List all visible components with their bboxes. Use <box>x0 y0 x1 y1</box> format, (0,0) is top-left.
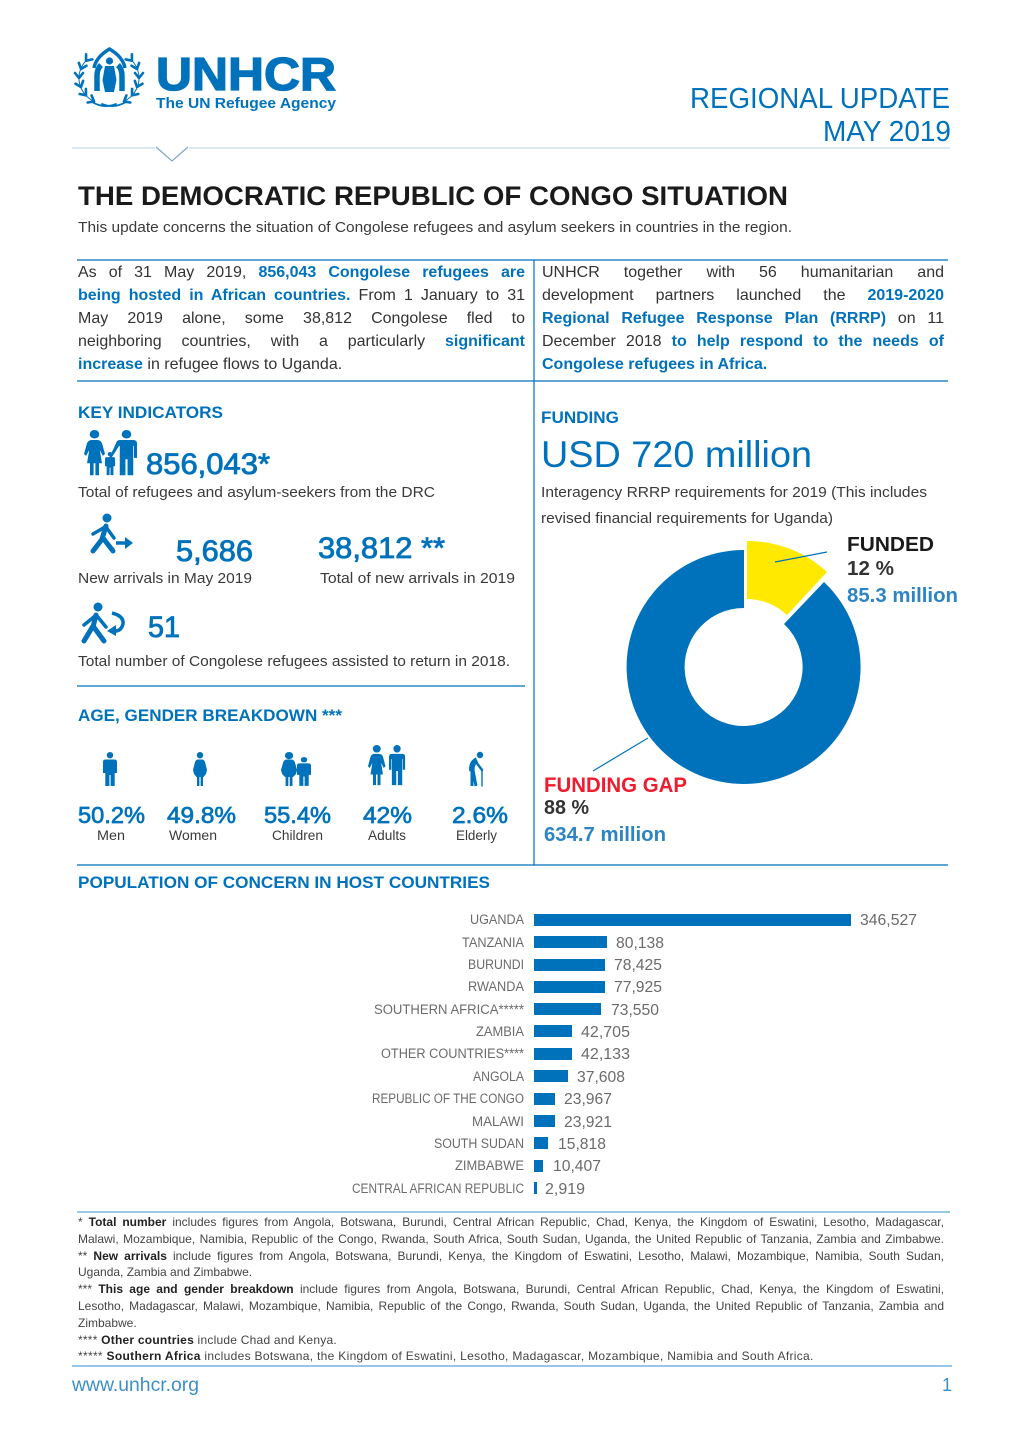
footnotes: Zimbabwe. <box>78 1316 137 1330</box>
stat: women: 49.8% <box>167 802 236 828</box>
icon: man <box>103 752 117 786</box>
footnotes: *** This age and gender breakdown include figures from Angola, Botswana, Burundi, Central African Republic, Chad, Kenya, the Kingdom of Eswatini, <box>78 1282 944 1296</box>
footnotes: ** New arrivals include figures from Angola, Botswana, Burundi, Kenya, the Kingdom of Eswatini, Lesotho, Malawi, Mozambique, Namibia, South Sudan, <box>78 1249 944 1263</box>
callout: funded: 12 % <box>847 558 894 580</box>
footnotes: Lesotho, Madagascar, Malawi, Mozambique, Namibia, Republic of the Congo, Rwanda, South Sudan, Uganda, the United Republic of Tanzania, Zambia and <box>78 1299 944 1313</box>
text block: response plan: development partners launched the 2019-2020 <box>542 287 944 304</box>
bar chart: REPUBLIC OF THE CONGO <box>372 1091 524 1106</box>
stat: children <box>264 802 331 843</box>
text block: situation summary: As of 31 May 2019, 856,043 Congolese refugees are <box>78 264 525 281</box>
stat: elderly: Elderly <box>456 828 497 843</box>
page number: 1 <box>942 1375 952 1395</box>
label: assisted returns: Total number of Congolese refugees assisted to return in 2018. <box>78 653 510 670</box>
callout: funding gap <box>544 774 687 846</box>
figure: new arrivals 2019: 38,812 ** <box>318 532 445 565</box>
icon: walking person with arrow <box>93 514 133 551</box>
footnotes <box>78 1214 944 1366</box>
label: total refugees: Total of refugees and asylum-seekers from the DRC <box>78 484 435 501</box>
bar chart: ANGOLA <box>473 1069 524 1084</box>
footnotes: **** Other countries include Chad and Kenya. <box>78 1333 337 1347</box>
donut chart <box>593 541 861 784</box>
text block: response plan: December 2018 to help respond to the needs of <box>542 333 944 350</box>
stat: women <box>167 802 236 843</box>
footer url: www.unhcr.org <box>71 1375 199 1396</box>
bar chart: CENTRAL AFRICAN REPUBLIC <box>352 1181 524 1196</box>
heading: key indicators: KEY INDICATORS <box>78 403 223 422</box>
bar chart: 23,921 <box>564 1114 612 1131</box>
icon: woman <box>193 752 207 786</box>
bar chart <box>352 912 917 1198</box>
text block: requirements note: Interagency RRRP requirements for 2019 (This includes <box>541 484 927 501</box>
footnotes: Uganda, Zambia and Zimbabwe. <box>78 1265 252 1279</box>
figure: new arrivals May: 5,686 <box>176 535 253 568</box>
panel: key indicators <box>78 403 515 670</box>
bar chart: 42,133 <box>581 1046 630 1063</box>
bar chart: TANZANIA <box>462 935 524 950</box>
text block: situation summary: being hosted in African countries. From 1 January to 31 <box>78 287 525 304</box>
figure: total requirements: USD 720 million <box>541 434 812 475</box>
label: new arrivals May: New arrivals in May 2019 <box>78 570 252 587</box>
stat: men <box>78 802 145 843</box>
bar chart: UGANDA <box>470 912 524 927</box>
icon: adults <box>368 745 405 785</box>
text block: situation summary <box>78 261 525 379</box>
bar chart: 73,550 <box>611 1002 659 1019</box>
stat: adults <box>363 802 412 843</box>
figure: assisted returns: 51 <box>148 611 180 644</box>
bar chart: 78,425 <box>614 957 662 974</box>
bar chart: MALAWI <box>472 1114 524 1129</box>
heading: population of concern: POPULATION OF CONCERN IN HOST COUNTRIES <box>78 873 490 892</box>
subtitle: This update concerns the situation of Congolese refugees and asylum seekers in countries in the region. <box>78 219 792 236</box>
bar chart: 42,705 <box>581 1024 630 1041</box>
footnotes: * Total number includes figures from Angola, Botswana, Burundi, Central African Republic, Chad, Kenya, the Kingdom of Eswatini, Lesotho, Madagascar, <box>78 1215 944 1229</box>
footnotes: ***** Southern Africa includes Botswana, the Kingdom of Eswatini, Lesotho, Madagascar, Mozambique, Namibia and South Africa. <box>78 1349 814 1363</box>
callout: funded: 85.3 million <box>847 585 958 607</box>
icon: family <box>84 430 137 475</box>
stat: men: Men <box>97 828 125 843</box>
bar chart: RWANDA <box>468 979 524 994</box>
bar chart: OTHER COUNTRIES**** <box>381 1046 525 1061</box>
stat: women: Women <box>169 828 217 843</box>
icon: elderly <box>472 752 483 786</box>
text block: response plan: Congolese refugees in Africa. <box>542 356 767 373</box>
text block: situation summary: May 2019 alone, some 38,812 Congolese fled to <box>78 310 525 327</box>
bar chart: 23,967 <box>564 1091 612 1108</box>
bar chart: 346,527 <box>860 912 917 929</box>
stat: adults: 42% <box>363 802 412 828</box>
stat: elderly: 2.6% <box>452 802 508 828</box>
bar chart: 15,818 <box>558 1136 606 1153</box>
heading: age gender breakdown: AGE, GENDER BREAKDOWN *** <box>78 706 342 725</box>
panel: funding <box>541 408 958 846</box>
bar chart: 37,608 <box>577 1069 625 1086</box>
text block: response plan <box>542 261 944 379</box>
bar chart: SOUTHERN AFRICA***** <box>374 1002 525 1017</box>
heading: funding: FUNDING <box>541 408 619 427</box>
label: new arrivals 2019: Total of new arrivals in 2019 <box>320 570 515 587</box>
figure: total refugees: 856,043* <box>146 448 270 481</box>
text block: situation summary: increase in refugee flows to Uganda. <box>78 356 342 373</box>
panel: population of concern <box>78 873 917 1198</box>
stat: children: 55.4% <box>264 802 331 828</box>
stat: elderly <box>452 802 508 843</box>
bar chart: 2,919 <box>545 1181 585 1198</box>
text block: requirements note: revised financial requirements for Uganda) <box>541 510 833 527</box>
icon: children <box>281 752 311 786</box>
report type heading: REGIONAL UPDATE <box>690 83 950 115</box>
logo tagline: The UN Refugee Agency <box>156 95 337 112</box>
report date: MAY 2019 <box>823 116 951 148</box>
callout: funded <box>847 534 958 607</box>
stat: children: Children <box>272 828 323 843</box>
bar chart: 77,925 <box>614 979 662 996</box>
icon: UNHCR logo emblem <box>75 49 143 106</box>
icon: returning person <box>84 602 123 641</box>
callout: funded: FUNDED <box>847 534 934 556</box>
stat: adults: Adults <box>368 828 406 843</box>
bar chart: 10,407 <box>553 1158 601 1175</box>
text block: response plan: UNHCR together with 56 humanitarian and <box>542 264 944 281</box>
text block: situation summary: neighboring countries, with a particularly significant <box>78 333 525 350</box>
title: THE DEMOCRATIC REPUBLIC OF CONGO SITUATION <box>78 181 788 211</box>
bar chart: ZAMBIA <box>476 1024 524 1039</box>
bar chart: ZIMBABWE <box>455 1158 524 1173</box>
callout: funding gap: FUNDING GAP <box>544 774 687 797</box>
logo wordmark: UNHCR <box>156 48 336 100</box>
callout: funding gap: 634.7 million <box>544 824 666 846</box>
text block: requirements note <box>541 484 927 527</box>
bar chart: SOUTH SUDAN <box>434 1136 524 1151</box>
callout: funding gap: 88 % <box>544 797 589 819</box>
header <box>75 48 951 148</box>
bar chart: BURUNDI <box>468 957 524 972</box>
bar chart: 80,138 <box>616 935 664 952</box>
stat: men: 50.2% <box>78 802 145 828</box>
footnotes: Malawi, Mozambique, Namibia, Republic of the Congo, Rwanda, South Africa, South Sudan, Uganda, the United Republic of Tanzania, Zambia and Zimbabwe. <box>78 1232 944 1246</box>
panel: age and gender breakdown <box>78 706 508 843</box>
text block: response plan: Regional Refugee Response Plan (RRRP) on 11 <box>542 310 944 327</box>
